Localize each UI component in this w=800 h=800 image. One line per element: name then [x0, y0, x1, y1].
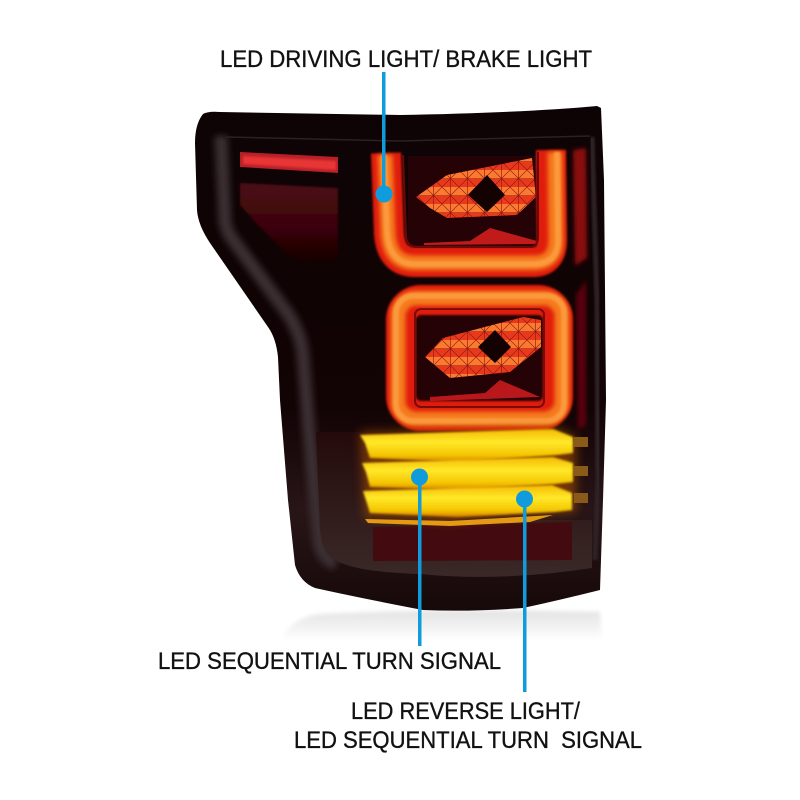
upper window	[408, 156, 540, 248]
right side amber blocks	[574, 437, 588, 503]
upper lens diamond	[468, 175, 505, 212]
lower window	[418, 310, 542, 405]
marker dot	[516, 490, 533, 508]
leader line	[523, 499, 526, 692]
label: LED SEQUENTIAL TURN SIGNAL	[158, 648, 501, 675]
sequential yellow bars	[360, 427, 588, 526]
leader line	[418, 477, 422, 646]
callout: sequential turn signal	[158, 468, 501, 675]
lower ring inner seam	[415, 309, 544, 407]
marker dot	[411, 468, 428, 486]
callout: driving and brake light	[220, 46, 592, 202]
right red side glow top	[573, 148, 587, 266]
upper U light core	[384, 152, 558, 264]
upper lens lower reflection	[424, 228, 537, 245]
upper light guide U	[384, 150, 558, 264]
right red side glow bottom	[576, 280, 586, 430]
yellow glow	[360, 427, 576, 522]
upper left dark red panel	[240, 183, 338, 263]
bar 1	[360, 429, 573, 462]
callout: reverse light and sequential turn signal	[294, 490, 642, 754]
leader line	[382, 72, 386, 194]
lower lens reflection	[430, 380, 540, 401]
upper U orange	[385, 152, 556, 263]
tail light assembly	[195, 106, 606, 611]
lamp housing	[195, 106, 606, 611]
label line 2: LED SEQUENTIAL TURN SIGNAL	[294, 727, 642, 754]
label line 1: LED REVERSE LIGHT/	[351, 698, 580, 725]
lower lens	[425, 317, 541, 378]
red reflector mesh	[373, 522, 572, 561]
lower ring red surround	[401, 300, 558, 416]
top rim highlight	[226, 136, 590, 141]
bar 2	[362, 457, 573, 490]
marker dot	[376, 186, 392, 202]
upper lens	[416, 158, 536, 218]
lower light guide ring	[396, 296, 564, 421]
lower ring orange	[398, 298, 562, 419]
label: LED DRIVING LIGHT/ BRAKE LIGHT	[220, 46, 592, 73]
lower smoked panel	[316, 432, 592, 577]
upper left brake bar	[240, 152, 338, 173]
right edge band	[592, 137, 598, 560]
grey trim band	[221, 136, 336, 564]
upper U inner dark seam	[403, 152, 538, 247]
lower lens diamond	[478, 330, 511, 363]
upper U red surround	[386, 150, 552, 262]
bar 3	[363, 485, 572, 517]
bottom amber strip	[365, 515, 553, 526]
lower ring light core	[396, 296, 564, 421]
floor reflection	[282, 610, 602, 640]
